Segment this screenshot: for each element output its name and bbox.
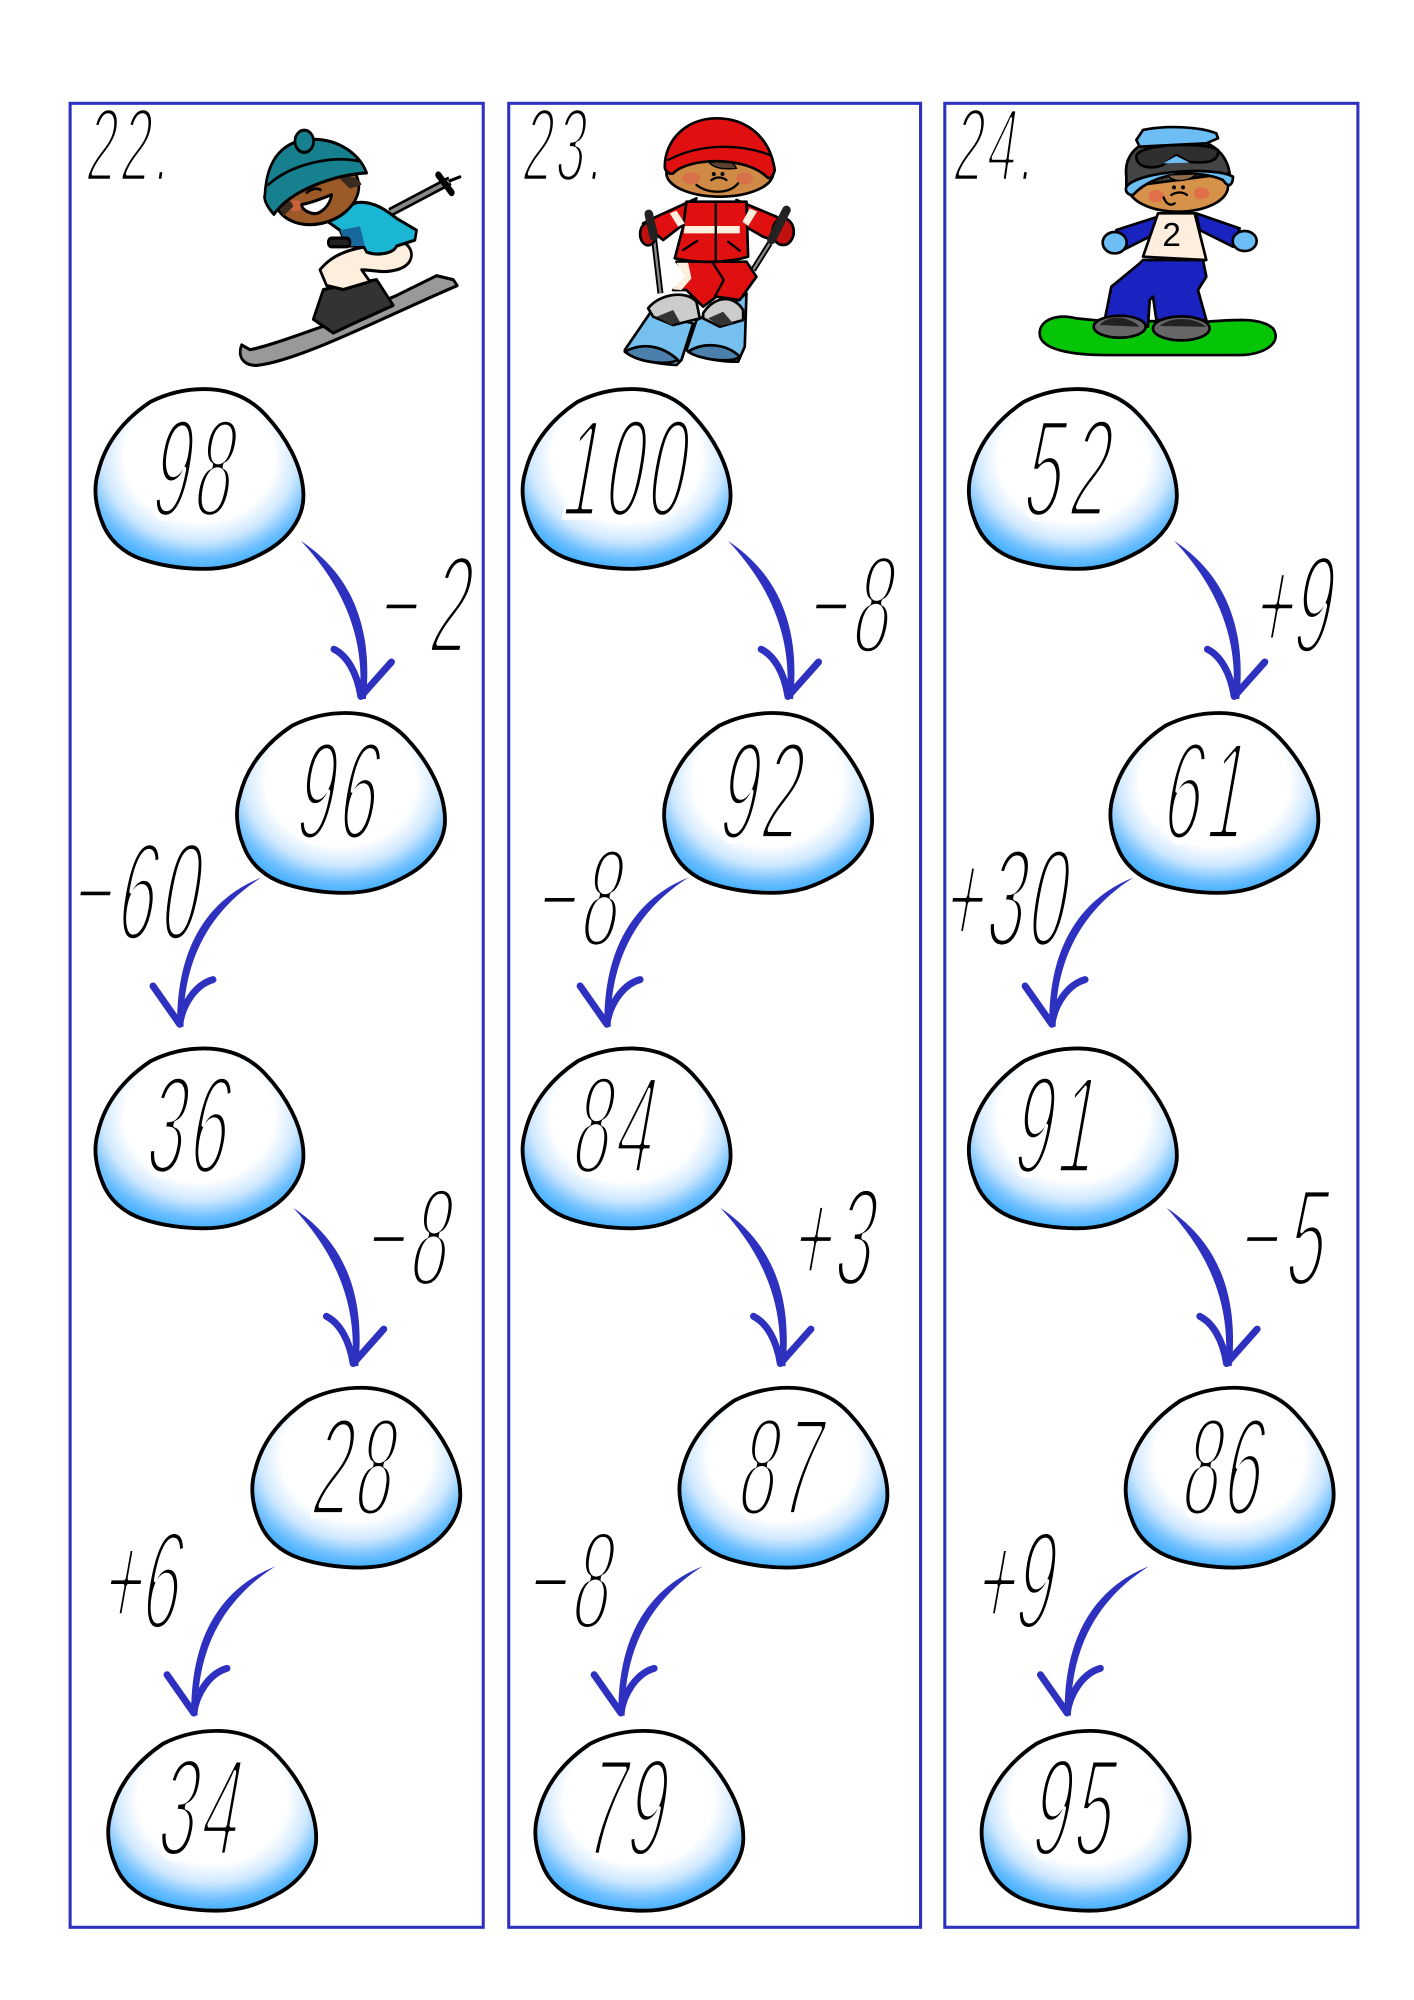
number 52: 52: [1015, 389, 1134, 547]
snowball 28: [252, 1388, 460, 1568]
snowball 86: [1126, 1388, 1334, 1568]
bib number 2: 2: [1162, 217, 1181, 254]
label minus 8: −8: [517, 1502, 634, 1659]
number 92: 92: [710, 712, 822, 870]
panel: problem 22: [62, 87, 500, 1927]
label plus 9: +9: [966, 1502, 1071, 1659]
number 84: 84: [563, 1046, 676, 1204]
arrow from 100 to 92: [728, 541, 819, 699]
number 61: 61: [1154, 712, 1269, 870]
label plus 6: +6: [93, 1502, 197, 1659]
number 98: 98: [143, 389, 255, 547]
label minus 5: −5: [1229, 1159, 1351, 1316]
number 34: 34: [149, 1729, 261, 1886]
arrow from 84 to 87: [720, 1208, 811, 1366]
panel: problem 23: [509, 87, 921, 1927]
arrow from 86 to 95: [1040, 1566, 1149, 1716]
snowball 98: [95, 389, 303, 569]
arrow from 87 to 79: [594, 1566, 703, 1716]
icon: skier in teal hat: [240, 130, 460, 365]
number 91: 91: [1004, 1046, 1119, 1204]
number 96: 96: [287, 712, 399, 870]
arrow from 52 to 61: [1174, 541, 1265, 699]
label plus 30: +30: [934, 819, 1087, 977]
snowball 79: [535, 1731, 743, 1911]
heading: 23.: 23.: [517, 87, 618, 204]
label minus 8: −8: [356, 1159, 472, 1316]
snowball 84: [523, 1048, 731, 1228]
heading: 22.: 22.: [81, 87, 185, 204]
snowball 91: [969, 1048, 1177, 1228]
heading: 24.: 24.: [948, 87, 1049, 204]
arrow from 96 to 36: [153, 878, 261, 1027]
label plus 9: +9: [1244, 526, 1349, 683]
icon: skier in red: [625, 118, 794, 365]
snowball 61: [1110, 713, 1318, 893]
label plus 3: +3: [783, 1159, 894, 1316]
panel frame 22: [70, 103, 483, 1927]
arrow from 36 to 28: [293, 1208, 384, 1366]
snowball 100: [523, 389, 731, 569]
arrow from 91 to 86: [1167, 1208, 1257, 1366]
snowball 95: [982, 1731, 1190, 1911]
number 79: 79: [576, 1729, 686, 1886]
panel: problem 24: [934, 87, 1358, 1927]
panel frame 24: [945, 103, 1358, 1927]
snowball 52: [969, 389, 1177, 569]
number 87: 87: [729, 1388, 841, 1546]
snowball 92: [664, 713, 872, 893]
arrow from 61 to 91: [1025, 878, 1133, 1027]
number 100: 100: [553, 389, 708, 547]
label minus 8: −8: [798, 526, 915, 683]
panel frame 23: [509, 103, 921, 1927]
arrow from 98 to 96: [301, 541, 391, 699]
number 95: 95: [1022, 1729, 1135, 1886]
label minus 60: −60: [62, 813, 223, 970]
arrow from 92 to 84: [580, 878, 689, 1027]
snowball 96: [237, 713, 445, 893]
label minus 2: −2: [368, 526, 500, 683]
snowball 34: [108, 1731, 316, 1911]
number 86: 86: [1173, 1388, 1283, 1546]
snowball 36: [95, 1048, 303, 1228]
number 28: 28: [303, 1388, 416, 1546]
number 36: 36: [137, 1046, 250, 1204]
icon: snowboarder: [1040, 127, 1276, 355]
arrow from 28 to 34: [167, 1566, 275, 1716]
label minus 8: −8: [526, 819, 643, 977]
snowball 87: [679, 1388, 887, 1568]
